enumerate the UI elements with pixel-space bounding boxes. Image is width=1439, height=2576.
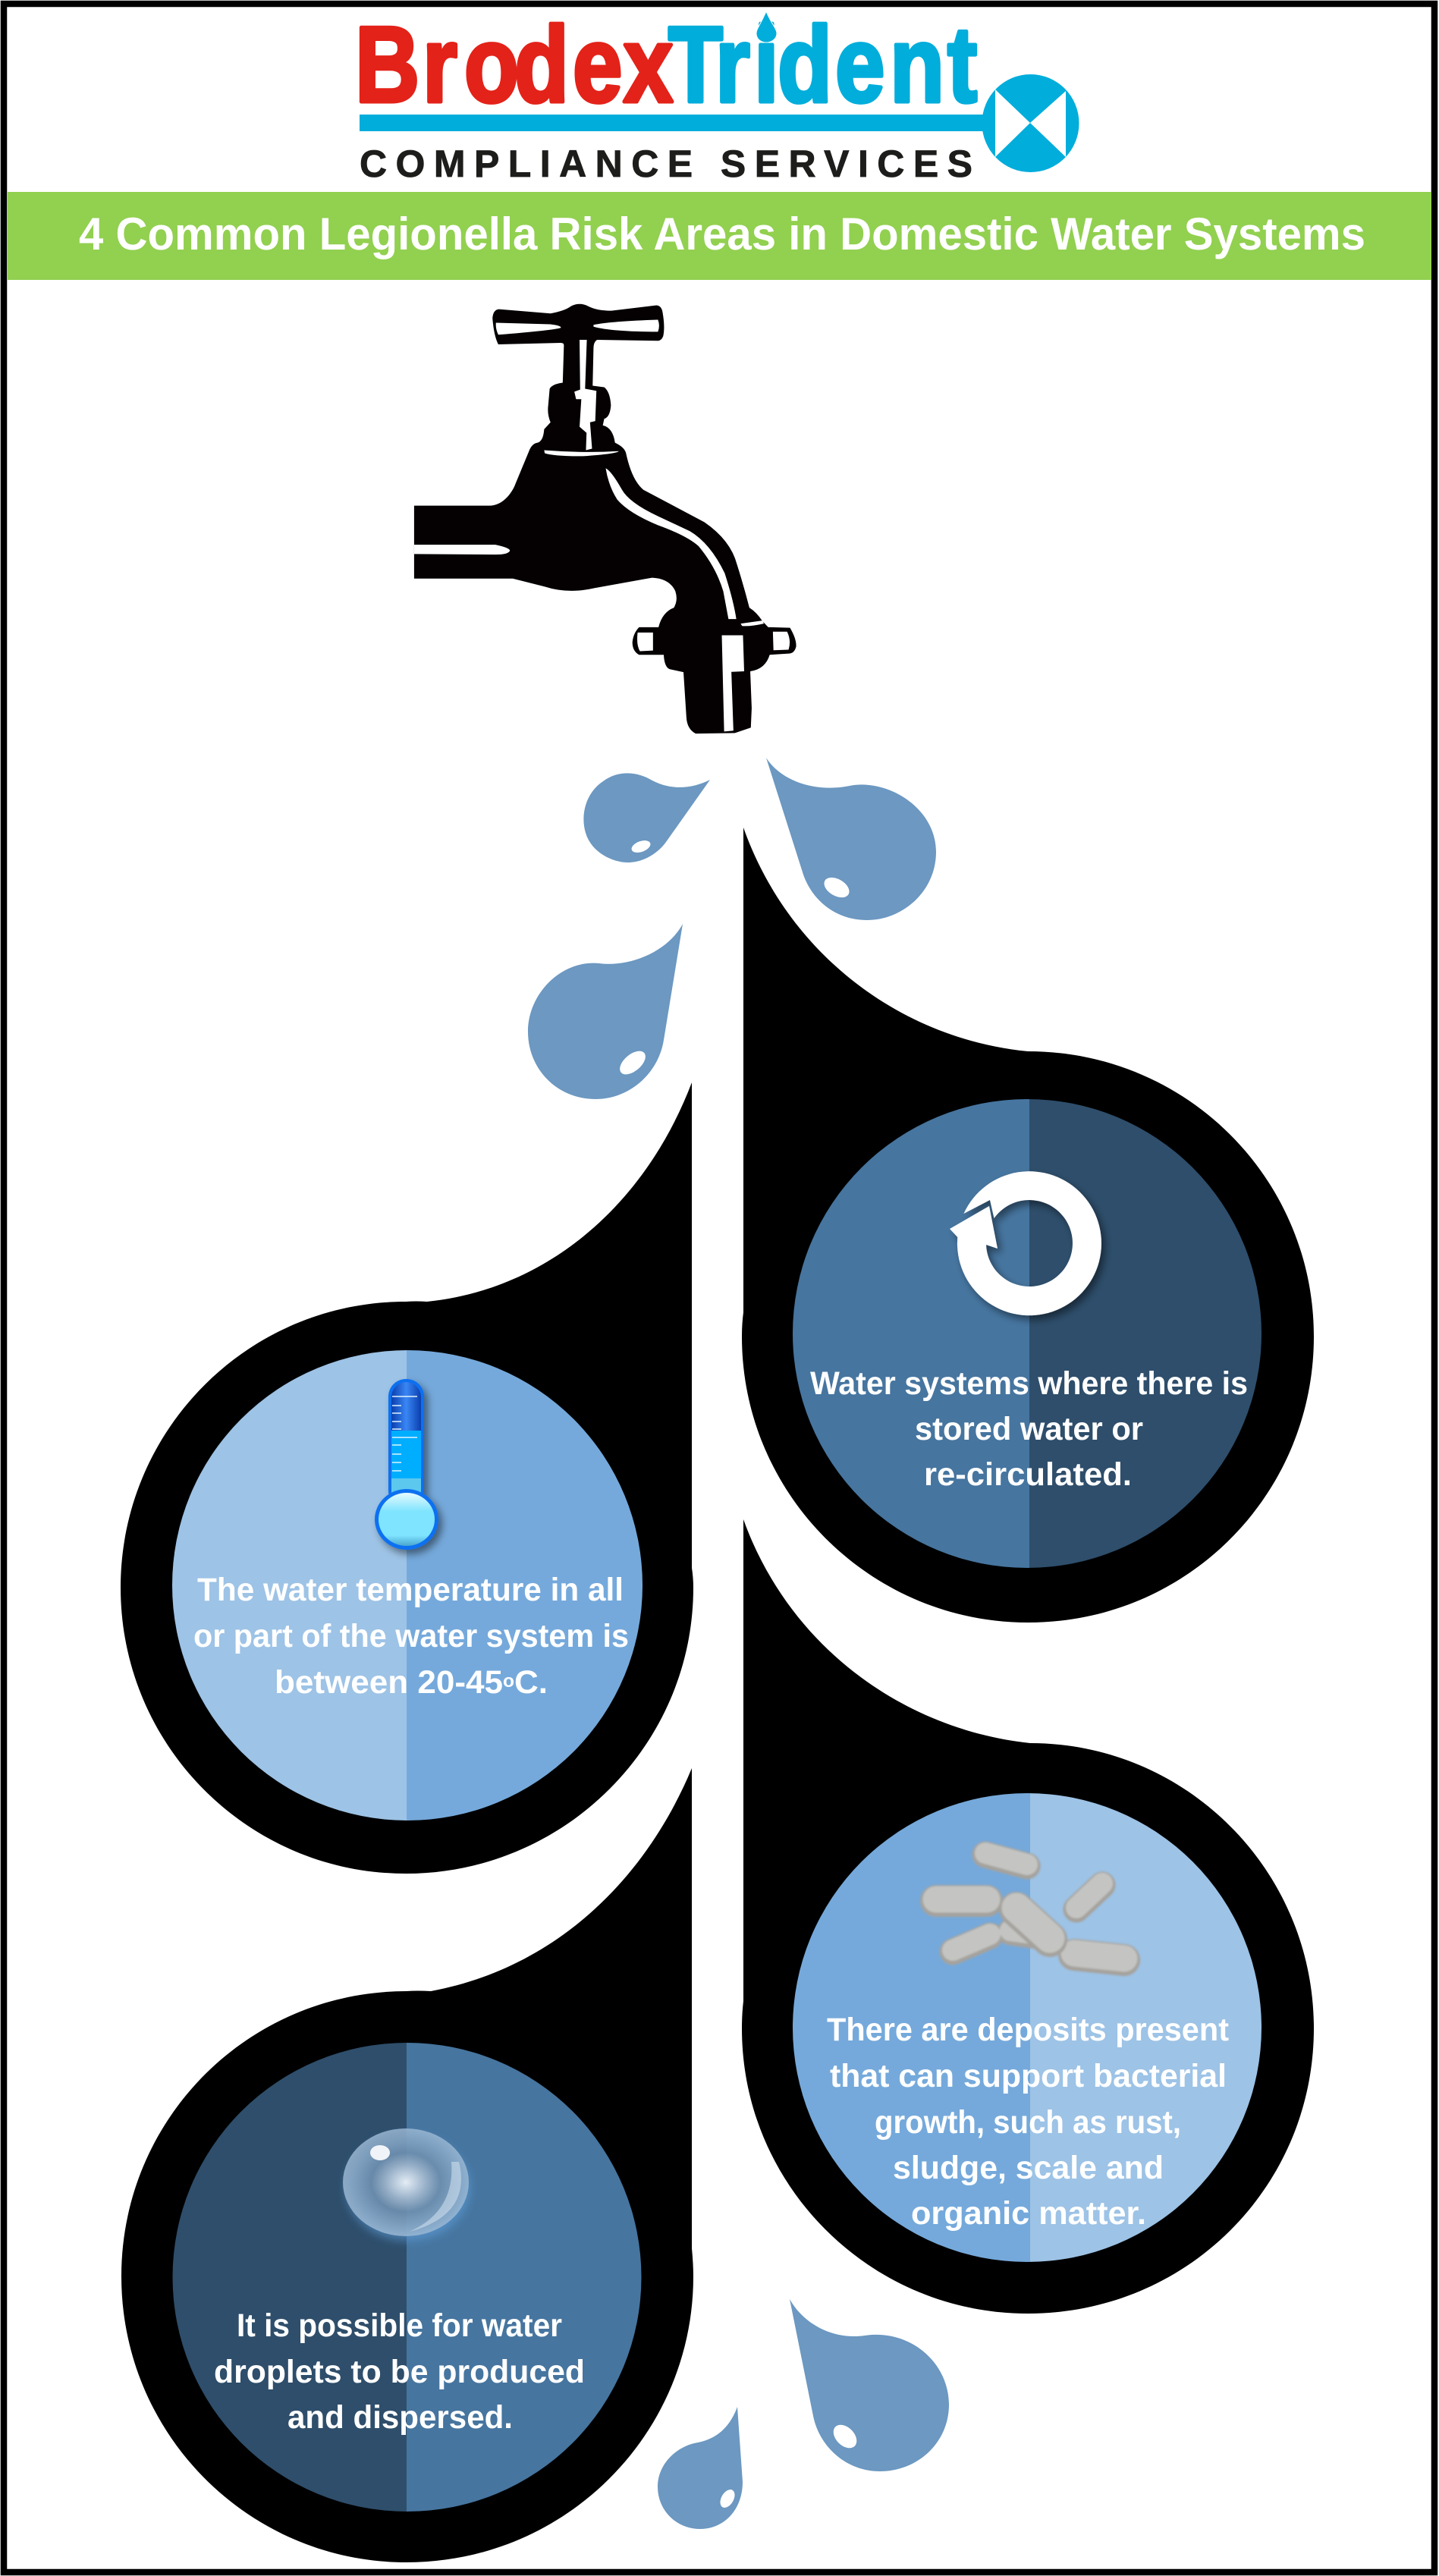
black teardrop (742, 1519, 1314, 2314)
text: droplets: and dispersed. (287, 2399, 513, 2436)
text: water temperature: C. (514, 1664, 548, 1701)
text: water temperature: The water temperature in all (197, 1572, 624, 1608)
two-tone circle (167, 1346, 646, 1824)
text: deposits (827, 2012, 1229, 2232)
text: stored water: Water systems where there is (810, 1365, 1248, 1402)
panel: water temperature (121, 1082, 693, 1874)
logo strapline: COMPLIANCE SERVICES (360, 143, 972, 185)
logo pipe bar (360, 115, 986, 131)
text: droplets: It is possible for water (237, 2307, 562, 2344)
black teardrop (121, 1768, 693, 2562)
text: deposits: that can support bacterial (830, 2058, 1227, 2094)
logo: Brodex Trident Compliance Services (355, 5, 1079, 185)
water drop bottom right (790, 2299, 949, 2471)
title: 4 Common Legionella Risk Areas in Domestic Water Systems (79, 209, 1365, 259)
water drop top left (583, 773, 710, 862)
text: water temperature: or part of the water system is (193, 1618, 629, 1654)
icon: water droplet (343, 2128, 470, 2241)
text: deposits: growth, such as rust, (875, 2104, 1181, 2141)
water drop bottom left (658, 2407, 743, 2529)
text: stored water (810, 1365, 1248, 1493)
text: stored water: stored water or (915, 1411, 1143, 1447)
text: water temperature: between 20-45 (275, 1664, 498, 1701)
panel: deposits (742, 1519, 1314, 2314)
black teardrop (121, 1082, 693, 1874)
panel: stored or re-circulated water (742, 828, 1314, 1623)
logo wordmark: Brodex: Brodex (355, 5, 673, 124)
icon: recirculation arrow (950, 1171, 1101, 1315)
text: droplets: droplets to be produced (214, 2354, 585, 2390)
text: water temperature: o (503, 1671, 514, 1692)
title banner (8, 192, 1431, 280)
text: droplets (214, 2307, 585, 2436)
panel: droplets dispersed (121, 1768, 693, 2562)
two-tone circle (789, 1790, 1265, 2268)
two-tone circle (167, 2037, 646, 2518)
logo wordmark: Trident: Trident (668, 5, 977, 124)
text: water temperature (193, 1572, 629, 1701)
water drop middle left (528, 924, 683, 1099)
text: deposits: sludge, scale and (893, 2150, 1164, 2186)
text: stored water: re-circulated. (924, 1456, 1132, 1493)
logo water drop (756, 11, 777, 42)
icon: faucet (414, 304, 796, 734)
two-tone circle (789, 1092, 1272, 1578)
icon: thermometer (375, 1379, 438, 1550)
text: deposits: There are deposits present (827, 2012, 1229, 2048)
water drop top right (766, 758, 936, 920)
black teardrop (742, 828, 1314, 1623)
icon: bacteria (936, 1853, 1124, 1960)
logo valve symbol (982, 74, 1079, 172)
text: deposits: organic matter. (911, 2195, 1146, 2232)
